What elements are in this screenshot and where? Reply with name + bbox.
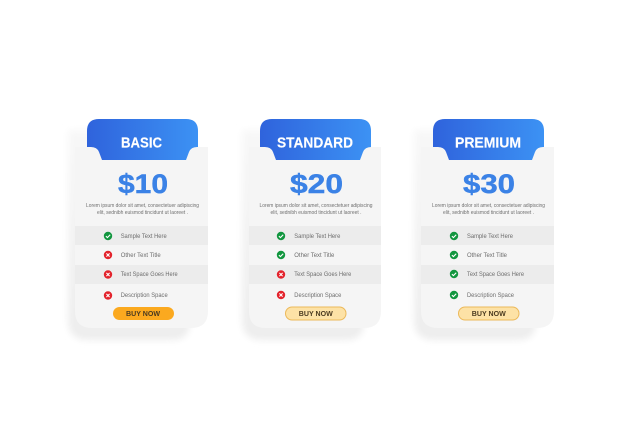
price: $20 (290, 169, 343, 199)
price: $10 (118, 169, 168, 199)
stripe three (421, 265, 554, 284)
feature text: Description Space (294, 293, 342, 299)
button label: BUY NOW (299, 309, 334, 318)
feature text: Text Space Goes Here (121, 272, 178, 278)
icon: check (104, 232, 112, 240)
icon: cross (277, 291, 285, 299)
icon: cross (104, 270, 112, 279)
price: $30 (463, 169, 515, 199)
header tab (87, 119, 198, 162)
description line two: elit, sednibh euismod tincidunt ut laoreet . (270, 210, 362, 216)
feature text: Sample Text Here (294, 234, 341, 240)
icon: check (450, 251, 458, 259)
feature text: Description Space (467, 293, 515, 299)
icon: cross (104, 291, 112, 300)
buy button (286, 307, 346, 320)
description: Lorem ipsum dolor sit amet, consectetuer adipiscing (86, 203, 199, 209)
stripe one (75, 226, 208, 245)
card shadow (414, 130, 536, 340)
icon: check (277, 232, 285, 240)
buy button (113, 307, 174, 320)
feature text: Text Space Goes Here (294, 272, 352, 278)
plan name: PREMIUM (455, 136, 521, 152)
feature text: Other Text Title (294, 253, 335, 259)
card body (421, 147, 554, 328)
card shadow (68, 130, 190, 340)
icon: check (450, 232, 458, 240)
panel: premium plan (414, 119, 554, 340)
header tab (260, 119, 371, 162)
description line two: elit, sednibh euismod tincidunt ut laoreet . (97, 210, 188, 216)
feature text: Text Space Goes Here (467, 272, 525, 278)
plan name: BASIC (121, 136, 162, 152)
stripe three (75, 265, 208, 284)
plan name: STANDARD (277, 136, 353, 152)
feature text: Sample Text Here (467, 234, 514, 240)
button label: BUY NOW (472, 309, 507, 318)
stripe three (249, 265, 381, 284)
feature text: Other Text Title (121, 253, 161, 259)
card shadow (242, 130, 364, 340)
description: Lorem ipsum dolor sit amet, consectetuer adipiscing (432, 203, 545, 209)
card body (249, 147, 381, 328)
description line two: elit, sednibh euismod tincidunt ut laoreet . (443, 210, 534, 216)
stripe one (421, 226, 554, 245)
icon: check (450, 291, 458, 299)
icon: check (277, 251, 285, 259)
icon: cross (104, 251, 112, 259)
header tab (433, 119, 544, 162)
feature text: Sample Text Here (121, 234, 167, 240)
feature text: Description Space (121, 293, 168, 299)
buy button (458, 307, 519, 320)
feature text: Other Text Title (467, 253, 508, 259)
icon: cross (277, 270, 285, 279)
panel: standard plan (242, 119, 381, 340)
stripe one (249, 226, 381, 245)
icon: check (450, 270, 458, 278)
card body (75, 147, 208, 328)
description: Lorem ipsum dolor sit amet, consectetuer adipiscing (260, 203, 373, 209)
button label: BUY NOW (126, 309, 161, 318)
panel: basic plan (68, 119, 208, 340)
